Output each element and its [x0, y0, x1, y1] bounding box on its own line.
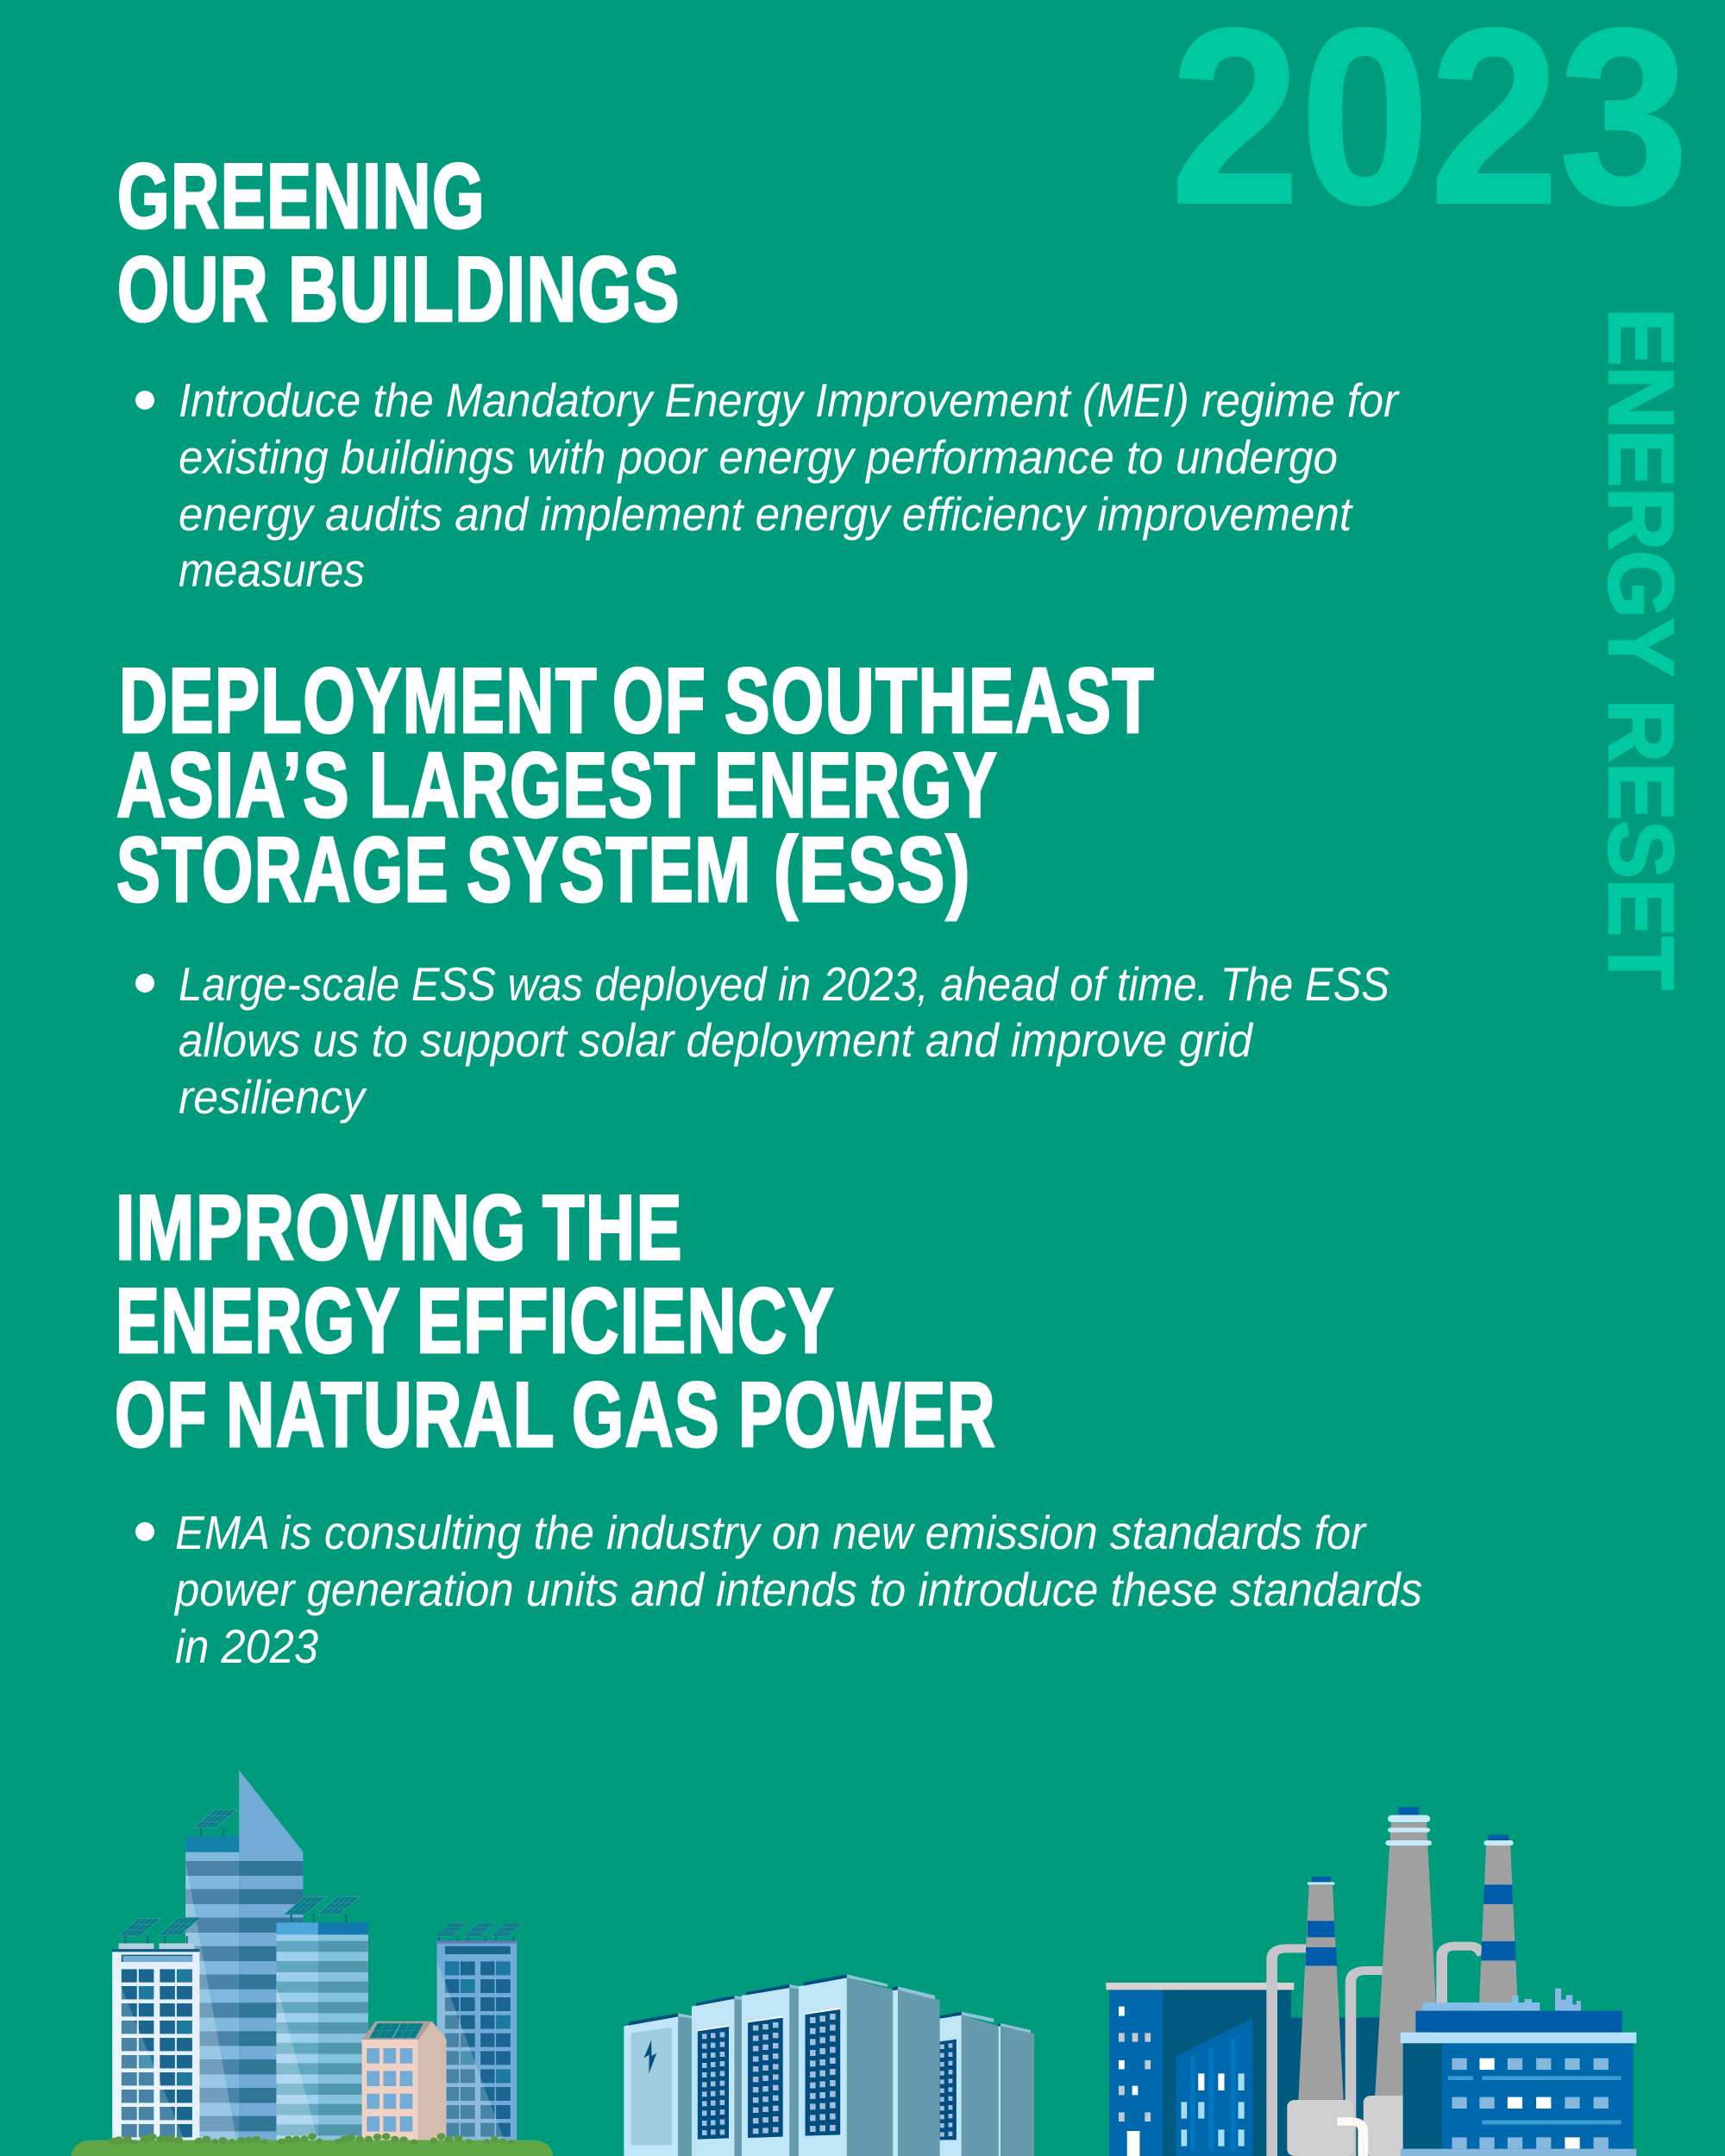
vertical label: energy reset: ENERGY RESET [1590, 308, 1693, 990]
heading: deployment of ESS [116, 649, 1155, 921]
heading: improving natural gas efficiency: EFFICIENCY [417, 1269, 835, 1372]
heading: deployment of ESS: SYSTEM [467, 818, 752, 921]
heading: deployment of ESS: SOUTHEAST [724, 649, 1155, 752]
heading: greening our buildings [117, 144, 681, 341]
text block: MEI bullet: Introduce the Mandatory Energy Improvement (MEI) regime for [179, 373, 1400, 427]
heading: improving natural gas efficiency [115, 1175, 996, 1466]
heading: deployment of ESS: LARGEST [369, 733, 696, 837]
text block: emission standards bullet: in 2023 [175, 1620, 318, 1673]
illustration: natural gas power plant [1106, 1807, 1636, 2156]
text block: ESS bullet: Large-scale ESS was deployed in 2023, ahead of time. The ESS [179, 957, 1389, 1011]
text block: MEI bullet: energy audits and implement energy efficiency improvement [179, 487, 1354, 541]
blue tower right [435, 1922, 524, 2141]
storage unit: second cabinet [692, 1996, 742, 2156]
illustration: battery energy storage system [624, 1974, 1034, 2156]
storage unit: control panel [624, 2013, 692, 2156]
heading: improving natural gas efficiency: OF [115, 1363, 208, 1466]
chimney right [1479, 1834, 1518, 2003]
storage unit: front cabinet [799, 1974, 940, 2156]
heading: deployment of ESS: OF [612, 649, 706, 752]
text block: MEI bullet [135, 373, 1400, 597]
storage unit: third cabinet [742, 1984, 800, 2156]
connecting pipes [1272, 1946, 1483, 2156]
heading: deployment of ESS: DEPLOYMENT [119, 649, 598, 752]
heading: improving natural gas efficiency: ENERGY [116, 1269, 401, 1372]
heading: greening our buildings: BUILDINGS [288, 237, 681, 341]
illustration: green buildings with solar panels [71, 1771, 553, 2156]
heading: deployment of ESS: ASIA’S [116, 733, 350, 837]
heading: improving natural gas efficiency: THE [543, 1175, 683, 1279]
heading: greening our buildings: GREENING [117, 144, 486, 248]
icon: lightning bolt [643, 2040, 656, 2073]
text block: emission standards bullet: power generation units and intends to introduce these standards [173, 1563, 1422, 1616]
chimney centre [1337, 1807, 1440, 2156]
text block: emission standards bullet [135, 1506, 1422, 1673]
rear plant building [1106, 1983, 1406, 2156]
rear storage units [940, 2012, 1034, 2156]
chimney left [1287, 1877, 1353, 2156]
text block: MEI bullet: measures [179, 543, 365, 597]
main tower [185, 1771, 303, 2141]
heading: improving natural gas efficiency: GAS [572, 1363, 720, 1466]
heading: deployment of ESS: STORAGE [116, 818, 449, 921]
heading: deployment of ESS: ENERGY [714, 733, 998, 837]
heading: improving natural gas efficiency: NATURAL [226, 1363, 555, 1466]
heading: deployment of ESS: (ESS) [774, 818, 971, 921]
text block: MEI bullet: existing buildings with poor energy performance to undergo [179, 430, 1338, 484]
ground and shrubs [71, 2133, 553, 2156]
small house with rooftop solar [362, 2021, 447, 2141]
heading: improving natural gas efficiency: POWER [738, 1363, 996, 1466]
heading: greening our buildings: OUR [117, 237, 269, 341]
text block: ESS bullet: resiliency [179, 1070, 367, 1124]
text block: ESS bullet [135, 957, 1389, 1124]
text block: ESS bullet: allows us to support solar deployment and improve grid [179, 1013, 1254, 1067]
mid-rise striped building [276, 1896, 368, 2141]
heading: improving natural gas efficiency: IMPROVING [116, 1175, 527, 1279]
text block: emission standards bullet: EMA is consulting the industry on new emission standards for [175, 1506, 1367, 1559]
front plant building [1401, 1989, 1636, 2156]
white office building [111, 1917, 201, 2141]
